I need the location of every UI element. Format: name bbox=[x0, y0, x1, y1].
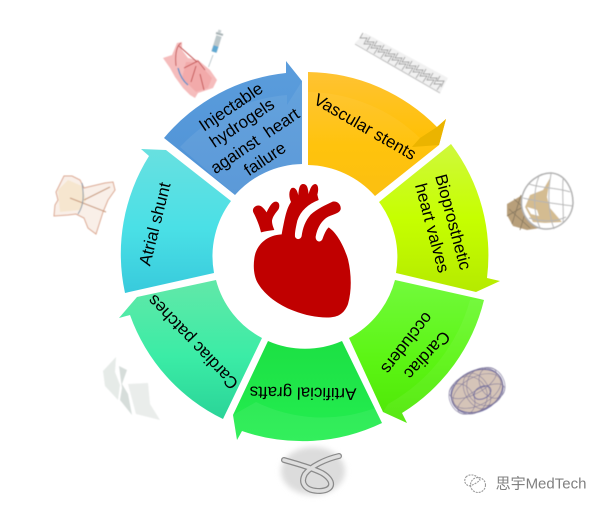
illustration: cardiac patches bbox=[103, 357, 160, 420]
illustration: injectable heart and syringe bbox=[163, 30, 223, 98]
segment: cardiac occluders: occluders bbox=[377, 308, 437, 378]
illustration: artificial graft bbox=[281, 447, 345, 495]
segment: artificial grafts bbox=[233, 341, 382, 441]
segment: cardiac patches bbox=[119, 280, 262, 419]
illustration: vascular stent bbox=[355, 33, 448, 93]
segment: cardiac patches: Cardiac patches bbox=[144, 291, 242, 393]
illustration: cardiac occluder bbox=[442, 360, 512, 421]
illustration: atrial shunt device bbox=[54, 176, 115, 234]
watermark: wechat logo bbox=[465, 475, 486, 492]
segment: atrial shunt: Atrial shunt bbox=[135, 180, 175, 268]
segment: injectable hydrogels against heart failure: hydrogels bbox=[206, 95, 278, 151]
segment: cardiac occluders: Cardiac bbox=[400, 327, 454, 383]
central heart icon bbox=[253, 184, 351, 317]
segment: bioprosthetic heart valves: heart valves bbox=[411, 181, 453, 275]
watermark text: 思宇MedTech bbox=[496, 476, 586, 492]
segment: bioprosthetic heart valves bbox=[379, 144, 500, 292]
segment: vascular stents: Vascular stents bbox=[310, 90, 420, 164]
segment: injectable hydrogels against heart failure: Injectable bbox=[196, 79, 266, 135]
segment: bioprosthetic heart valves: Bioprosthetic bbox=[431, 172, 475, 272]
segment: injectable hydrogels against heart failure: against heart bbox=[207, 104, 303, 178]
illustration: bioprosthetic valve bbox=[507, 173, 573, 230]
segment: atrial shunt bbox=[121, 149, 231, 293]
segment: artificial grafts: Artificial grafts bbox=[249, 383, 357, 403]
segment: injectable hydrogels against heart failure bbox=[164, 61, 303, 195]
segment: vascular stents bbox=[308, 72, 446, 196]
segment: injectable hydrogels against heart failure: failure bbox=[240, 138, 290, 180]
segment: cardiac occluders bbox=[349, 280, 484, 423]
